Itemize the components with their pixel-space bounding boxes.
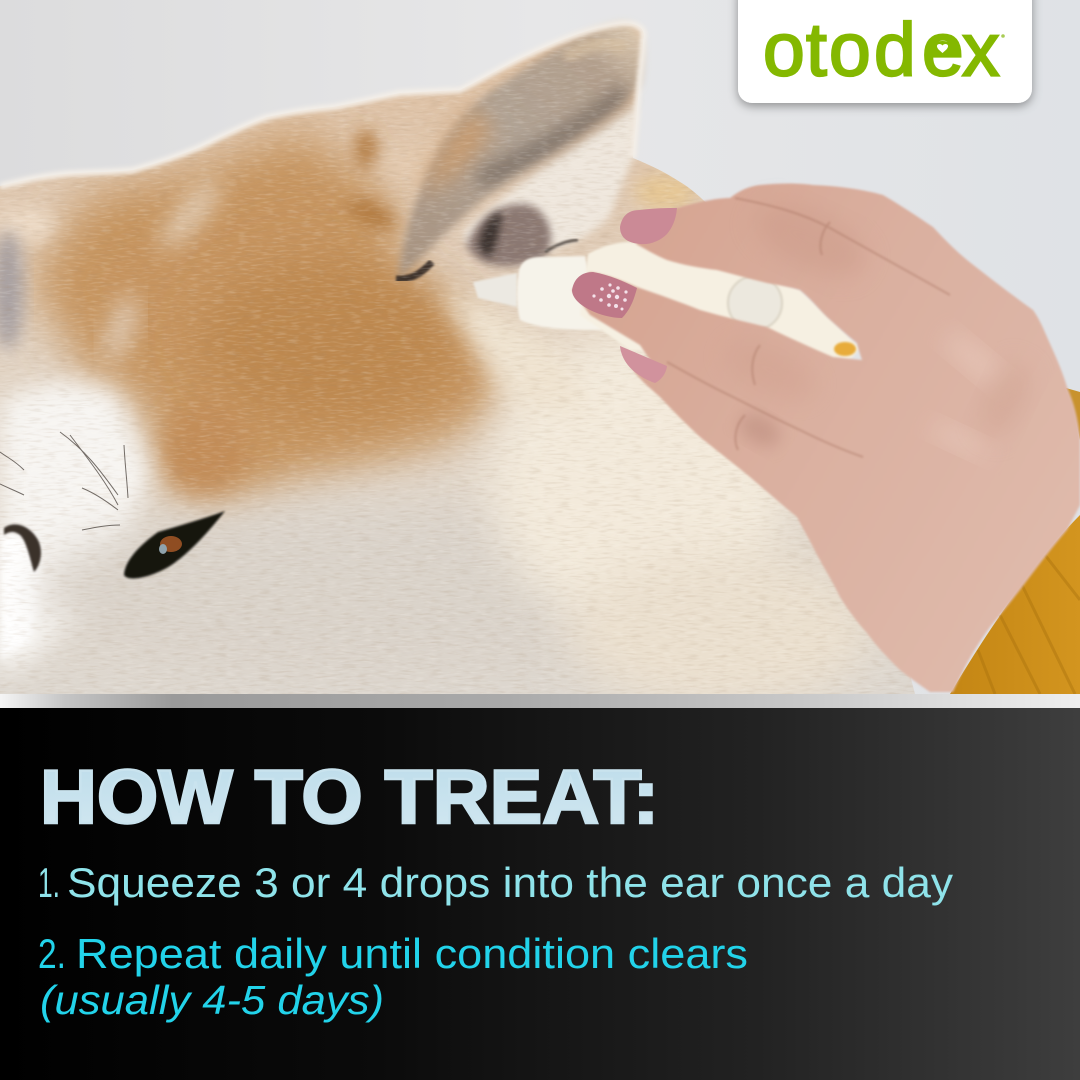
dog ear <box>396 23 643 280</box>
nail: index <box>620 208 677 244</box>
knuckle shading <box>741 220 1020 447</box>
logo heart in letter e <box>930 41 956 55</box>
photo: dog receiving ear drops <box>0 0 1080 710</box>
finger creases <box>667 198 950 457</box>
sweater sleeve <box>950 388 1080 694</box>
step 2: 2. <box>38 930 66 977</box>
logo card <box>738 0 1032 103</box>
hand <box>572 184 1080 692</box>
dog eye <box>0 432 225 578</box>
nail: ring <box>620 346 667 383</box>
photo background <box>0 0 1080 694</box>
title: HOW TO TREAT: <box>40 755 659 840</box>
dog head and fur <box>0 24 915 694</box>
logo trademark dot <box>1001 34 1005 38</box>
ear drop bottle <box>473 242 860 366</box>
step 2 note: (usually 4-5 days) <box>40 977 384 1023</box>
step 1: Squeeze 3 or 4 drops into the ear once a day <box>67 859 953 906</box>
step 1: 1. <box>38 859 60 906</box>
hand silhouette with fingers <box>572 184 1080 692</box>
pale fur rim along head and ear <box>0 23 644 186</box>
nail: middle with glitter <box>572 272 637 318</box>
fur texture <box>0 32 914 694</box>
step 2: Repeat daily until condition clears <box>76 930 748 977</box>
separator strip <box>0 694 1080 708</box>
logo wordmark: otodex <box>763 8 1000 92</box>
dark text panel <box>0 708 1080 1080</box>
